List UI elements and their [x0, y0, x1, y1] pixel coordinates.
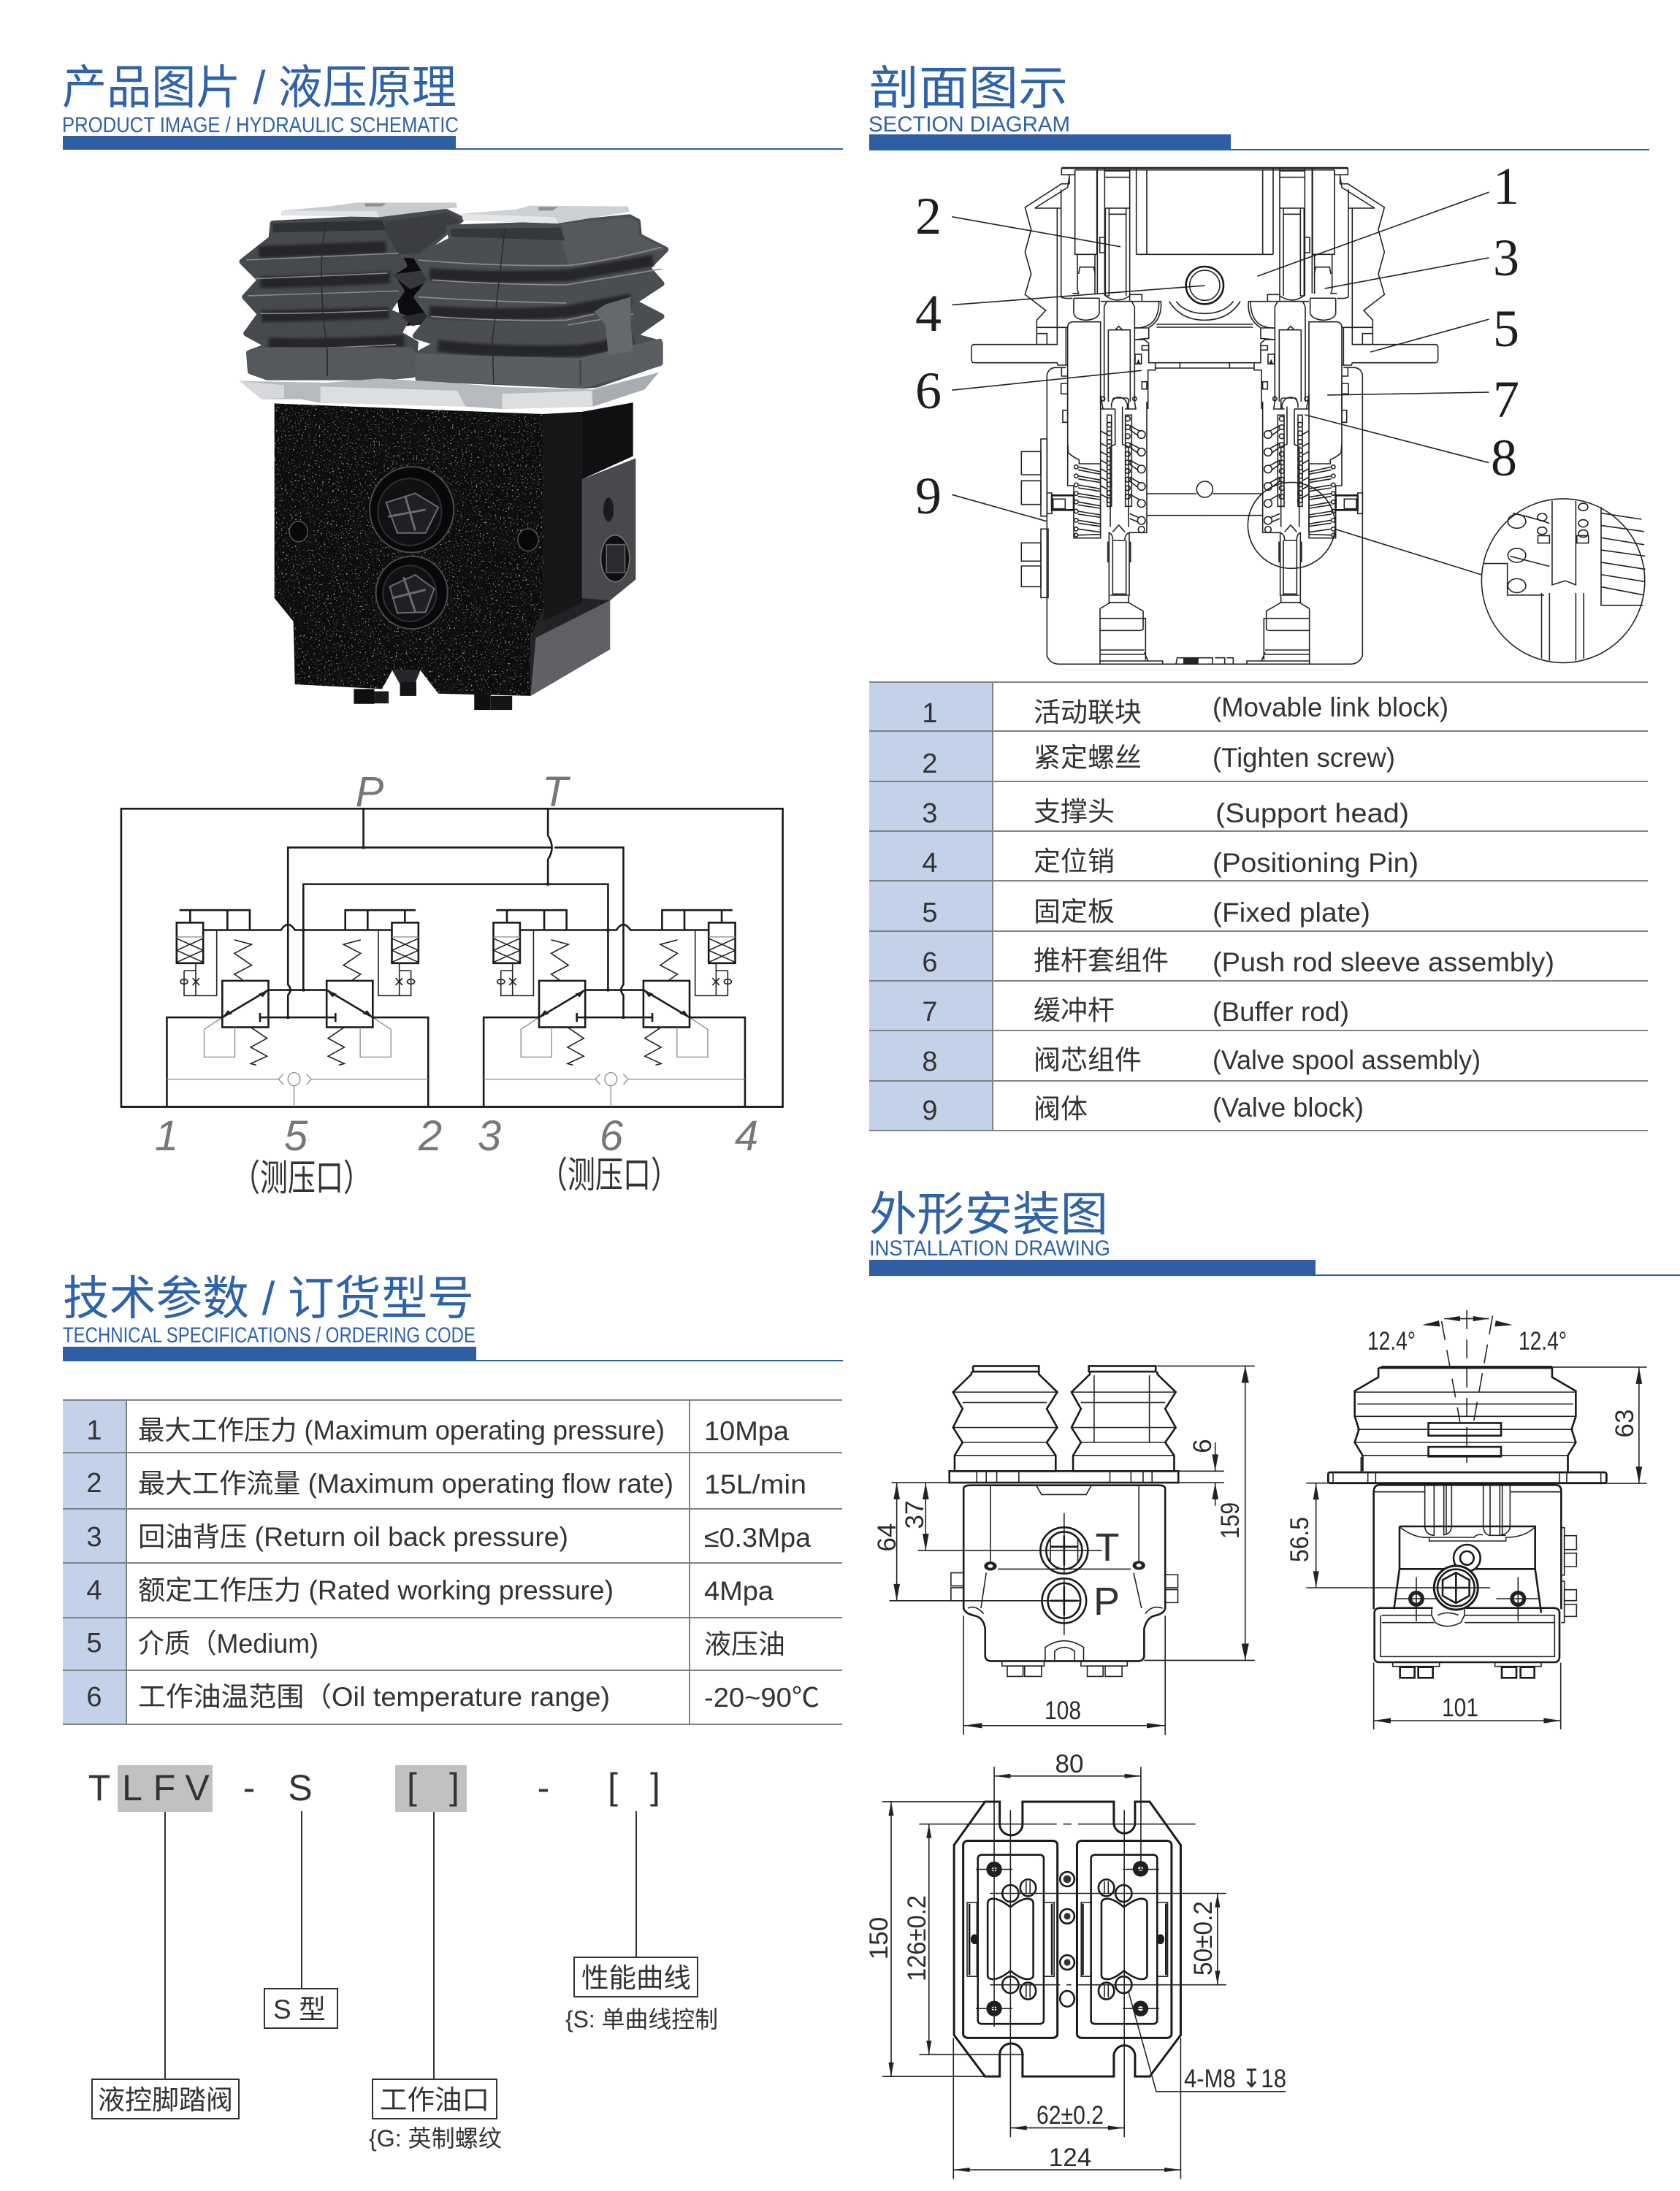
ordering code: -	[538, 1767, 549, 1808]
parts table: 2	[922, 749, 938, 779]
specifications table: 6	[86, 1682, 102, 1713]
parts table: 缓冲杆	[1034, 995, 1115, 1025]
option box: valve type	[92, 2079, 239, 2119]
heading: section diagram: SECTION DIAGRAM	[868, 112, 1070, 137]
section drawing with numbered callouts: 9	[915, 467, 942, 525]
hydraulic schematic: （测压口）	[232, 1158, 371, 1198]
heading: technical specifications: 技术参数 / 订货型号	[63, 1272, 474, 1325]
panel: technical specifications and ordering code	[63, 1272, 843, 2152]
heading: technical specifications	[63, 1272, 843, 1361]
specifications table: 工作油温范围（Oil temperature range)	[138, 1682, 610, 1712]
ordering code: S	[288, 1767, 313, 1808]
hydraulic schematic	[121, 768, 783, 1198]
option box: performance curve: {S: 单曲线控制	[565, 2006, 718, 2033]
parts table: (Tighten screw)	[1213, 743, 1395, 773]
specifications table: 2	[86, 1468, 102, 1499]
hydraulic schematic: 2	[418, 1112, 442, 1160]
specifications table: 15L/min	[704, 1469, 806, 1499]
panel: product image and hydraulic schematic	[62, 61, 843, 1198]
parts table: 定位销	[1034, 846, 1115, 876]
option box: performance curve	[565, 1957, 718, 2033]
hydraulic schematic: 4	[735, 1112, 758, 1160]
hydraulic schematic: 1	[155, 1112, 178, 1160]
option box: S type: S 型	[273, 1995, 326, 2024]
section drawing with numbered callouts: 1	[1493, 157, 1519, 215]
parts table: (Push rod sleeve assembly)	[1213, 947, 1554, 977]
option box: working port: {G: 英制螺纹	[369, 2125, 502, 2152]
ordering code: ]	[449, 1766, 459, 1807]
parts table: 8	[922, 1047, 938, 1077]
option box: valve type: 液控脚踏阀	[98, 2085, 233, 2115]
specifications table: 最大工作流量 (Maximum operating flow rate)	[138, 1469, 673, 1499]
specifications table: 液压油	[704, 1629, 785, 1659]
parts table: 7	[922, 997, 938, 1028]
hydraulic schematic: 3	[478, 1112, 501, 1160]
parts table: 1	[922, 698, 938, 729]
specifications table: -20~90℃	[704, 1683, 820, 1713]
heading: installation drawing	[869, 1188, 1680, 1276]
bottom view with dimensions: 4-M8 ↧18	[1184, 2065, 1286, 2093]
option box: working port	[369, 2079, 502, 2152]
ordering code: -	[243, 1767, 255, 1808]
parts table: (Support head)	[1215, 798, 1409, 828]
parts table: 固定板	[1034, 897, 1115, 927]
bottom view with dimensions	[865, 1750, 1286, 2179]
bottom view with dimensions: 126±0.2	[903, 1895, 931, 1981]
parts table: (Valve spool assembly)	[1213, 1045, 1481, 1075]
parts table: (Fixed plate)	[1213, 898, 1370, 928]
ordering code: T	[88, 1767, 110, 1808]
side view with dimensions: 12.4°	[1519, 1327, 1567, 1355]
front view with dimensions: 108	[1045, 1697, 1081, 1725]
heading: installation drawing: INSTALLATION DRAWING	[869, 1236, 1110, 1261]
specifications table: 介质（Medium)	[138, 1629, 318, 1659]
front view with dimensions: 37	[901, 1501, 929, 1529]
parts table: (Valve block)	[1213, 1093, 1364, 1123]
parts table: 支撑头	[1034, 797, 1115, 827]
bottom view with dimensions: 80	[1055, 1750, 1083, 1778]
specifications table: 1	[86, 1415, 102, 1446]
bottom view with dimensions: 150	[865, 1917, 893, 1959]
heading: section diagram: 剖面图示	[869, 62, 1068, 115]
front view with dimensions: T	[1096, 1526, 1119, 1569]
heading: product image	[62, 61, 843, 150]
parts table: 3	[922, 798, 938, 829]
option box: working port: 工作油口	[380, 2085, 489, 2115]
heading: product image: 产品图片 / 液压原理	[62, 61, 457, 114]
bottom view with dimensions: 50±0.2	[1189, 1901, 1218, 1976]
ordering code: V	[185, 1767, 210, 1808]
heading: installation drawing: 外形安装图	[869, 1188, 1108, 1241]
parts table	[869, 682, 1648, 1131]
product photo	[240, 202, 665, 710]
ordering code: L	[122, 1767, 142, 1808]
option box: performance curve: 性能曲线	[581, 1963, 691, 1993]
specifications table: 最大工作压力 (Maximum operating pressure)	[138, 1415, 665, 1445]
parts table: (Buffer rod)	[1213, 997, 1349, 1027]
panel: section diagram	[868, 62, 1649, 1131]
parts table: 5	[922, 898, 938, 928]
specifications table: 3	[86, 1522, 102, 1553]
section drawing with numbered callouts: 5	[1493, 299, 1519, 358]
bottom view with dimensions: 124	[1049, 2144, 1091, 2172]
ordering code: F	[153, 1767, 175, 1808]
hydraulic schematic: （测压口）	[540, 1155, 679, 1196]
side view with dimensions: 63	[1611, 1410, 1639, 1437]
hydraulic schematic: T	[542, 768, 570, 816]
front view with dimensions: 64	[873, 1523, 901, 1551]
specifications table: 5	[86, 1628, 102, 1659]
parts table: 阀体	[1034, 1094, 1088, 1124]
specifications table: 额定工作压力 (Rated working pressure)	[138, 1575, 614, 1605]
parts table: 4	[922, 848, 938, 879]
specifications table: 10Mpa	[704, 1416, 789, 1446]
specifications table: 4Mpa	[704, 1576, 774, 1606]
front view with dimensions: 6	[1188, 1439, 1217, 1453]
heading: section diagram	[868, 62, 1649, 150]
side view with dimensions	[1286, 1310, 1647, 1729]
specifications table: ≤0.3Mpa	[704, 1523, 811, 1553]
panel: installation drawing	[865, 1188, 1680, 2179]
hydraulic schematic: 6	[600, 1112, 624, 1160]
ordering code	[88, 1765, 718, 2152]
bottom view with dimensions: 62±0.2	[1036, 2101, 1104, 2130]
option box: S type	[264, 1989, 337, 2028]
section drawing with numbered callouts: 4	[915, 284, 942, 343]
section drawing with numbered callouts: 7	[1493, 370, 1519, 429]
front view with dimensions: P	[1093, 1580, 1120, 1624]
section drawing with numbered callouts: 3	[1493, 229, 1519, 287]
side view with dimensions: 12.4°	[1367, 1327, 1416, 1355]
parts table: 6	[922, 947, 938, 978]
hydraulic schematic: 5	[284, 1112, 308, 1160]
parts table: 9	[922, 1096, 938, 1126]
front view with dimensions: 159	[1216, 1502, 1245, 1539]
parts table: 活动联块	[1034, 697, 1142, 727]
parts table: (Positioning Pin)	[1213, 848, 1419, 878]
specifications table: 回油背压 (Return oil back pressure)	[138, 1522, 568, 1552]
specifications table: 4	[86, 1575, 102, 1606]
parts table: 推杆套组件	[1034, 946, 1169, 976]
side view with dimensions: 101	[1442, 1694, 1478, 1722]
side view with dimensions: 56.5	[1286, 1517, 1314, 1562]
ordering code: [	[608, 1766, 618, 1807]
heading: technical specifications: TECHNICAL SPECIFICATIONS / ORDERING CODE	[63, 1323, 476, 1347]
parts table: (Movable link block)	[1213, 692, 1448, 722]
parts table: 阀芯组件	[1034, 1045, 1142, 1075]
ordering code: [	[407, 1766, 417, 1807]
hydraulic schematic: P	[356, 768, 384, 816]
section drawing with numbered callouts: 6	[915, 362, 942, 420]
section drawing with numbered callouts	[915, 157, 1645, 664]
section drawing with numbered callouts: 2	[915, 187, 942, 245]
section drawing with numbered callouts: 8	[1491, 429, 1517, 487]
heading: product image: PRODUCT IMAGE / HYDRAULIC SCHEMATIC	[62, 113, 459, 137]
ordering code: ]	[650, 1766, 660, 1807]
specifications table	[63, 1400, 842, 1725]
front view with dimensions	[873, 1366, 1255, 1735]
parts table: 紧定螺丝	[1034, 743, 1142, 773]
